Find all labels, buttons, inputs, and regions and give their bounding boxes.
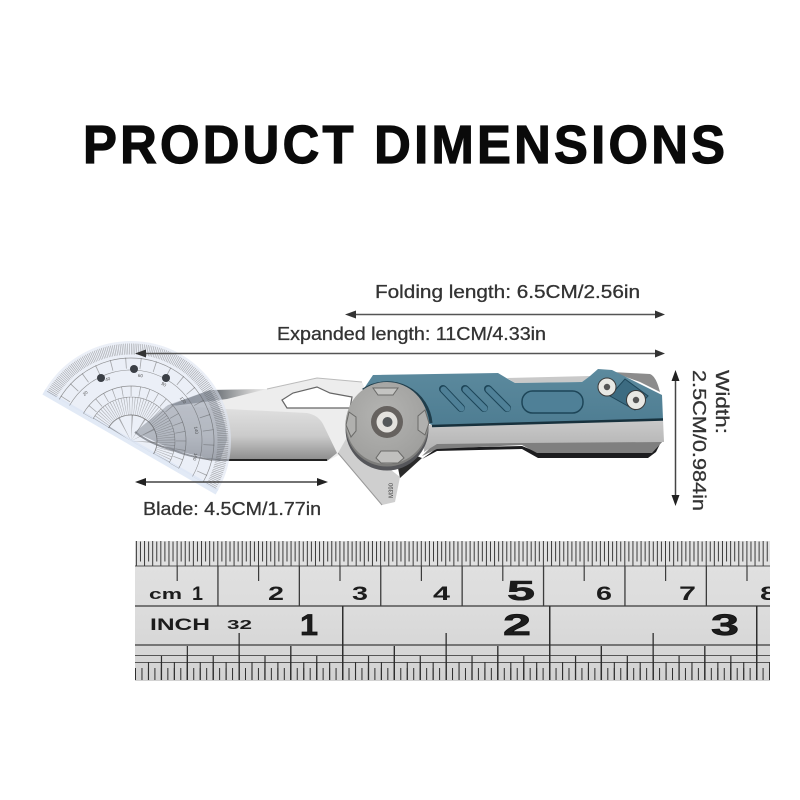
kicker tang [338,432,422,505]
steel ruler [135,541,777,681]
protractor numbers [80,349,223,463]
handle pill recess [522,391,583,413]
centimetre numbers: 8 [760,584,777,605]
centimetre numbers: 4 [433,584,451,605]
handle top liner [507,376,590,383]
label: folding length: Folding length: 6.5CM/2.56in [375,282,640,302]
folded knife [135,369,664,505]
protractor numbers: 60 [138,373,144,378]
label: width: Width: [712,370,732,434]
inch numbers [152,614,738,636]
handle back spacer [612,372,660,392]
inch numbers: 1 [300,609,318,642]
title: PRODUCT DIMENSIONS [83,116,725,175]
centimetre numbers: 5 [507,575,535,606]
centimetre numbers: cm [149,586,182,603]
label: width: 2.5CM/0.984in [689,370,709,511]
centimetre numbers: 6 [596,584,612,605]
label: expanded length: Expanded length: 11CM/4.33in [277,324,546,344]
blade [135,378,370,461]
handle slots [443,389,508,408]
arrow: blade length [135,478,328,486]
handle lower shadow [422,444,660,459]
centimetre ticks [136,552,770,586]
inch numbers: INCH [150,615,210,634]
arrow: folding length [345,310,665,318]
inch numbers: 3 [711,609,739,642]
arrow: width [672,370,680,506]
centimetre numbers [150,580,770,600]
protractor numbers: 160 [192,453,198,461]
clip recess [610,379,648,410]
inch numbers: 32 [227,617,252,632]
protractor numbers: 90 [160,381,168,388]
kicker tang: M390 [389,482,395,498]
ruler guide lines [135,566,770,662]
pivot disc [346,382,431,470]
protractor numbers: 140 [193,426,199,435]
centimetre numbers: 7 [679,584,696,605]
protractor [42,341,231,494]
protractor holes [97,365,170,382]
protractor numbers: 20 [82,389,89,397]
blade seen through protractor [135,390,227,461]
blue handle scale [363,369,663,426]
centimetre numbers: 3 [352,584,368,605]
handle dark bevel [422,440,664,456]
inch numbers: 2 [503,609,531,642]
label: width [689,370,732,511]
centimetre numbers: 1 [192,584,203,605]
clip screws [598,378,646,410]
protractor numbers: 40 [104,376,111,382]
handle steel liner [424,419,664,452]
protractor numbers: 120 [179,396,188,405]
arrow: expanded length [135,350,665,358]
inch ticks [135,643,770,674]
label: blade length: Blade: 4.5CM/1.77in [143,499,321,519]
centimetre numbers: 2 [268,584,284,605]
